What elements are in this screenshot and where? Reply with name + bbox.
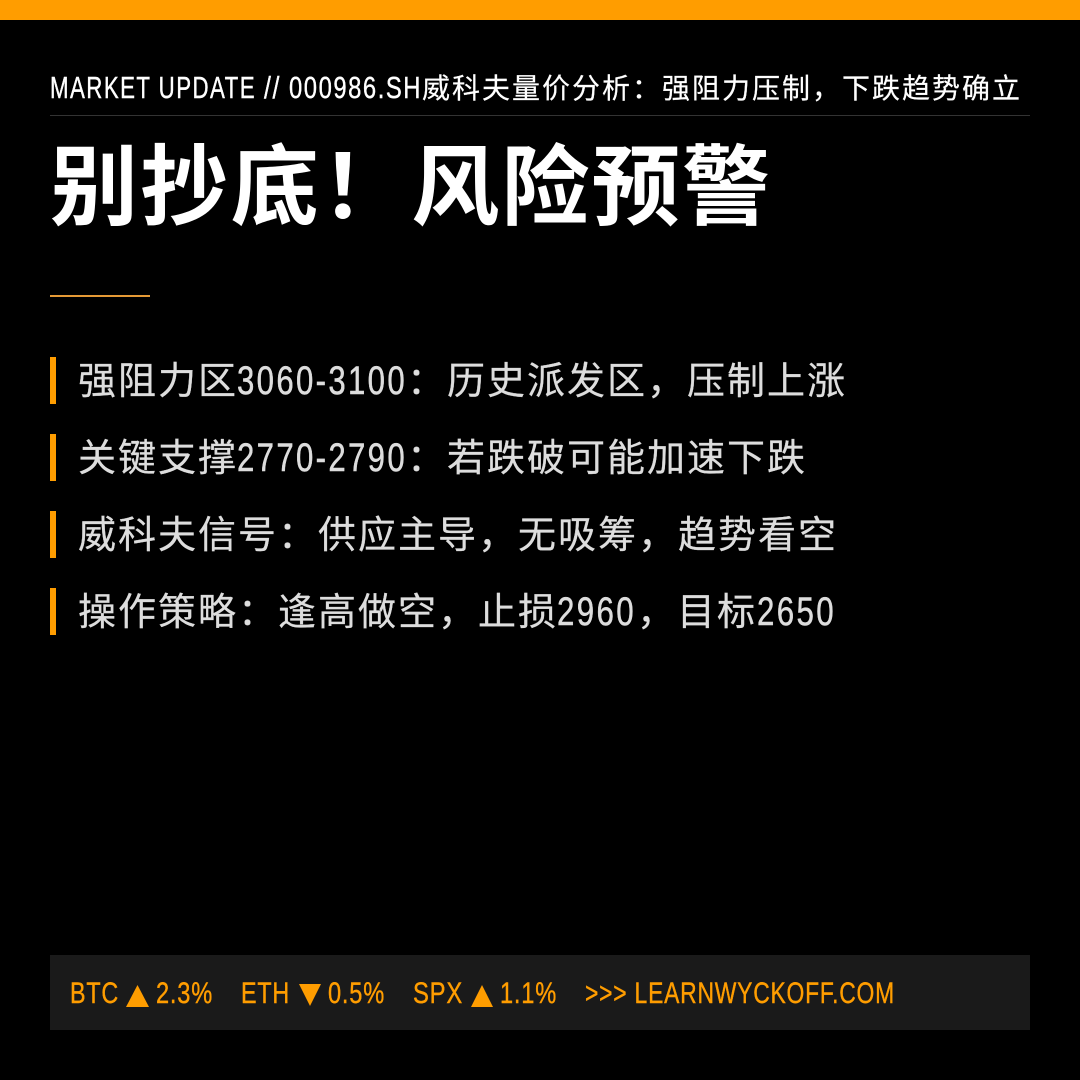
bullet: support: 2770-2790 [237,436,407,480]
bullet: support: ：若跌破可能加速下跌 [407,438,807,480]
ticker bar [50,955,1030,1030]
ticker: ETH: ETH [241,977,290,1010]
header divider [50,115,1030,116]
bullet: strategy: 2960 [557,590,636,634]
ticker: ETH value: 0.5% [328,977,385,1010]
bullet: strategy [50,588,836,635]
bullet: strategy: ，目标 [637,592,757,634]
top accent bar [0,0,1080,20]
header line: MARKET UPDATE [50,70,256,105]
icon: down triangle [299,984,321,1006]
header line: 威科夫量价分析：强阻力压制，下跌趋势确立 [422,73,1022,104]
icon: up triangle [126,985,149,1007]
bullet: resistance: ：历史派发区，压制上涨 [407,361,847,403]
bullet: strategy: 操作策略：逢高做空，止损 [78,592,558,634]
bullet: resistance: 3060-3100 [237,359,407,403]
ticker: website: >>> LEARNWYCKOFF.COM [585,977,895,1010]
icon: up triangle [471,985,493,1007]
ticker: SPX value: 1.1% [500,977,557,1010]
ticker: SPX: SPX [413,977,463,1010]
ticker: BTC value: 2.3% [156,977,213,1010]
header line [50,70,1022,105]
bullet: support: 关键支撑 [78,438,238,480]
ticker: BTC: BTC [70,977,119,1010]
bullet: wyckoff signal: 威科夫信号：供应主导，无吸筹，趋势看空 [78,515,838,557]
bullet: strategy: 2650 [757,590,836,634]
header line: // [264,70,281,105]
bullet: resistance [50,357,847,404]
bullet: support [50,434,807,481]
title: 别抄底！风险预警 [50,138,772,237]
orange rule [50,295,150,297]
header line: 000986.SH [289,70,422,105]
bullet: resistance: 强阻力区 [78,361,238,403]
